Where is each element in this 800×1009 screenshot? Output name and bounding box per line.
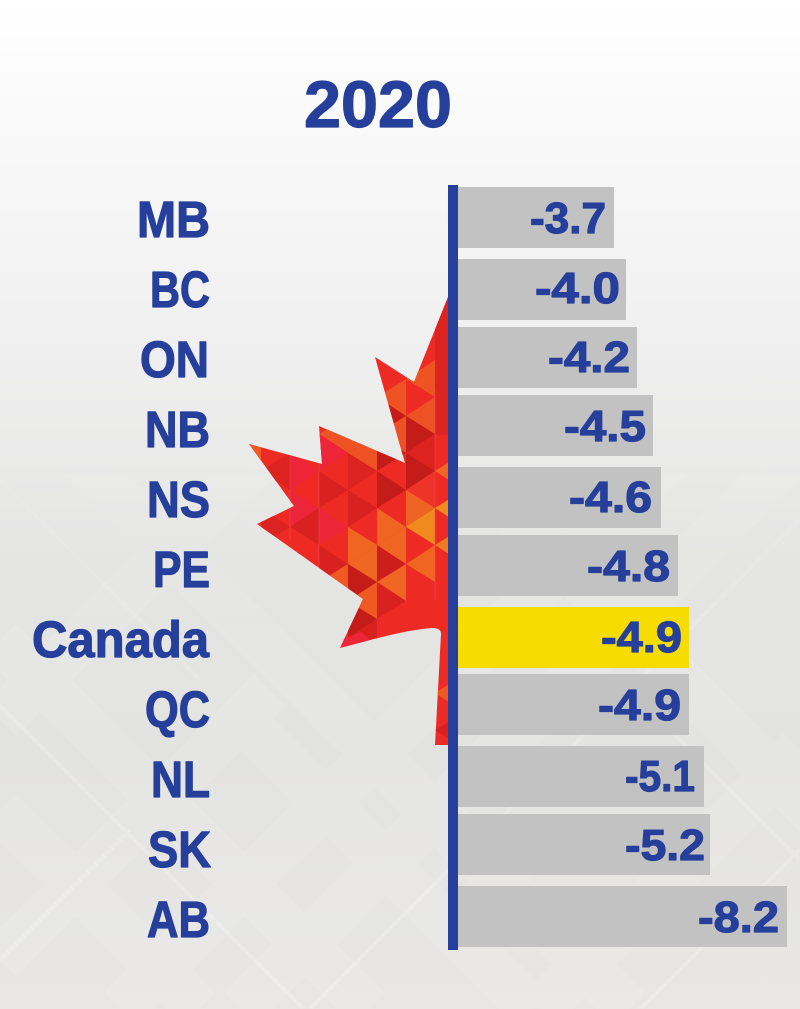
value labels: -5.1 <box>625 752 695 801</box>
region labels: MB <box>137 191 210 248</box>
region labels: ON <box>140 331 209 388</box>
region labels <box>32 191 211 948</box>
bar: PE <box>458 535 678 596</box>
region labels: NL <box>151 751 210 808</box>
region labels: BC <box>150 261 210 318</box>
bar chart <box>448 185 787 950</box>
title: 2020 <box>304 67 452 141</box>
bar: QC <box>458 674 689 735</box>
region labels: NS <box>147 471 210 528</box>
region labels: QC <box>145 681 210 738</box>
bar: AB <box>458 886 787 947</box>
value labels <box>530 194 779 942</box>
region labels: AB <box>147 891 210 948</box>
value labels: -4.6 <box>569 473 652 522</box>
value labels: -5.2 <box>625 821 705 870</box>
value labels: -4.8 <box>587 542 670 591</box>
region labels: PE <box>153 541 210 598</box>
axis line <box>448 185 458 950</box>
value labels: -4.0 <box>535 264 620 313</box>
bar: NB <box>458 395 653 456</box>
region labels: NB <box>145 401 210 458</box>
value labels: -4.2 <box>548 333 630 382</box>
value labels: -3.7 <box>530 194 606 243</box>
bar: NL <box>458 746 704 807</box>
bar: MB <box>458 187 614 248</box>
icon: half maple leaf <box>249 297 448 745</box>
value labels: -4.9 <box>601 613 682 662</box>
bar: Canada (highlighted) <box>458 607 689 668</box>
region labels: Canada <box>32 611 210 668</box>
bar: BC <box>458 259 626 320</box>
bar: ON <box>458 327 637 388</box>
value labels: -8.2 <box>698 893 779 942</box>
bar: NS <box>458 467 661 528</box>
value labels: -4.9 <box>598 681 681 730</box>
bar: SK <box>458 814 710 875</box>
value labels: -4.5 <box>564 402 646 451</box>
region labels: SK <box>148 821 211 878</box>
